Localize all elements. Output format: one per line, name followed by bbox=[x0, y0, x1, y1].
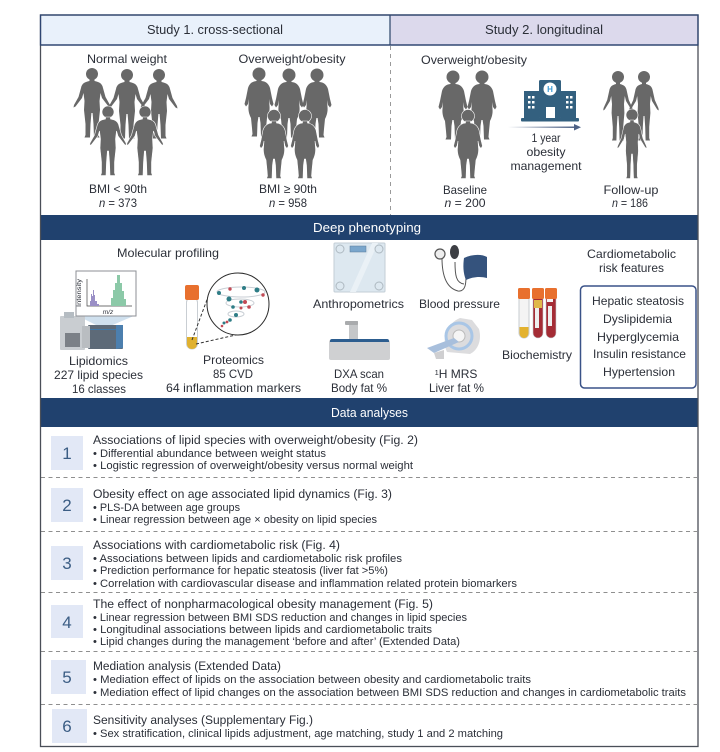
row 3: cardiometabolic risk: • Prediction performance for hepatic steatosis (liver fat >5%) bbox=[93, 565, 388, 577]
group: normal weight: Normal weight bbox=[87, 52, 168, 66]
row 1: overweight associations: • Differential abundance between weight status bbox=[93, 448, 327, 460]
group: normal weight bbox=[74, 52, 178, 210]
icon: hospital bbox=[521, 80, 579, 122]
row 3: cardiometabolic risk: • Correlation with cardiovascular disease and inflammation related protein biomarkers bbox=[93, 578, 518, 590]
row 6: sensitivity analyses bbox=[52, 709, 503, 743]
text: blood pressure: Blood pressure bbox=[419, 297, 500, 311]
panel: cardiometabolic risk list: Hypertension bbox=[603, 365, 675, 379]
text: molecular profiling: Molecular profiling bbox=[117, 246, 219, 260]
text: lipidomics: Lipidomics bbox=[69, 354, 128, 368]
heading: data analyses bbox=[40, 398, 698, 427]
panel: study 1 header bbox=[40, 15, 390, 45]
chart: mass spectrum bbox=[76, 271, 136, 316]
row 2: age associated lipid dynamics: • Linear regression between age × obesity on lipid species bbox=[93, 514, 377, 526]
row 3: cardiometabolic risk: • Associations between lipids and cardiometabolic risk profiles bbox=[93, 553, 402, 565]
chart: mass spectrum: Intensity bbox=[76, 278, 83, 307]
icon: weighing scale bbox=[334, 243, 385, 292]
row 5: mediation analysis: Mediation analysis (Extended Data) bbox=[93, 659, 281, 673]
group: baseline: Baseline bbox=[443, 183, 487, 197]
group: baseline: Overweight/obesity bbox=[421, 53, 527, 67]
text: 1H MRS: H MRS bbox=[439, 367, 477, 381]
text: obesity management bbox=[510, 131, 582, 173]
row 4: obesity management: • Linear regression between BMI SDS reduction and changes in lipid species bbox=[93, 612, 467, 624]
text: DXA scan: Body fat % bbox=[331, 381, 387, 395]
heading: deep phenotyping: Deep phenotyping bbox=[313, 221, 421, 235]
text: obesity management: obesity bbox=[526, 145, 566, 159]
row 6: sensitivity analyses: 6 bbox=[62, 717, 72, 736]
group: follow-up bbox=[603, 71, 659, 210]
row 2: age associated lipid dynamics bbox=[51, 487, 392, 526]
arrow: one year management bbox=[508, 124, 581, 130]
group: baseline: n = 200 bbox=[444, 196, 486, 210]
text: cardiometabolic risk features bbox=[587, 247, 676, 275]
panel: study 2 header: Study 2. longitudinal bbox=[485, 23, 603, 37]
text: biochemistry: Biochemistry bbox=[502, 348, 572, 362]
group: overweight/obesity cross-sectional: BMI ≥ 90th bbox=[259, 182, 317, 196]
text: lipidomics: 227 lipid species bbox=[54, 368, 143, 382]
icon: blood pressure cuff bbox=[435, 245, 487, 291]
row 1: overweight associations: • Logistic regression of overweight/obesity versus normal weight bbox=[93, 460, 413, 472]
text: obesity management: 1 year bbox=[532, 131, 560, 145]
icon: proteomics tube and protein funnel bbox=[185, 273, 269, 349]
icon: MRI scanner bbox=[427, 318, 480, 359]
group: follow-up: Follow-up bbox=[604, 183, 659, 197]
icon: biochemistry tubes bbox=[518, 288, 557, 338]
panel: cardiometabolic risk list: Dyslipidemia bbox=[603, 312, 672, 326]
text: cardiometabolic risk features: risk features bbox=[599, 261, 664, 275]
text: proteomics: 64 inflammation markers bbox=[166, 381, 301, 395]
panel: cardiometabolic risk list bbox=[580, 286, 696, 388]
row 2: age associated lipid dynamics: Obesity effect on age associated lipid dynamics (Fig. 3) bbox=[93, 487, 392, 501]
row 4: obesity management bbox=[51, 597, 467, 648]
group: follow-up: n = 186 bbox=[612, 196, 648, 210]
icon: mass spectrometer bbox=[60, 312, 136, 350]
row 4: obesity management: The effect of nonpharmacological obesity management (Fig. 5) bbox=[93, 597, 433, 611]
icon: hospital: H bbox=[547, 85, 553, 94]
group: overweight/obesity cross-sectional bbox=[238, 52, 346, 210]
row 5: mediation analysis: • Mediation effect of lipid changes on the association between BMI SDS reduction and changes in cardiometabolic traits bbox=[93, 687, 686, 699]
row 4: obesity management: 4 bbox=[62, 613, 72, 632]
text: cardiometabolic risk features: Cardiometabolic bbox=[587, 247, 676, 261]
text: proteomics: Proteomics bbox=[203, 353, 264, 367]
text: 1H MRS: 1 bbox=[435, 368, 439, 377]
panel: cardiometabolic risk list: Insulin resistance bbox=[593, 347, 686, 361]
row 3: cardiometabolic risk: Associations with cardiometabolic risk (Fig. 4) bbox=[93, 538, 340, 552]
row 4: obesity management: • Longitudinal associations between lipids and cardiometabolic traits bbox=[93, 624, 433, 636]
icon: DXA scanner bbox=[329, 321, 390, 360]
text: proteomics bbox=[166, 353, 301, 395]
panel: cardiometabolic risk list: Hepatic steatosis bbox=[592, 294, 684, 308]
text: proteomics: 85 CVD bbox=[213, 367, 253, 381]
row 6: sensitivity analyses: • Sex stratification, clinical lipids adjustment, age matching, study 1 and 2 matching bbox=[93, 728, 503, 740]
heading: data analyses: Data analyses bbox=[331, 406, 408, 420]
heading: deep phenotyping bbox=[40, 215, 698, 240]
row 1: overweight associations: Associations of lipid species with overweight/obesity (Fig. 2) bbox=[93, 433, 418, 447]
text: 1H MRS: Liver fat % bbox=[429, 381, 484, 395]
row 1: overweight associations: 1 bbox=[62, 444, 72, 463]
row 2: age associated lipid dynamics: • PLS-DA between age groups bbox=[93, 502, 240, 514]
row 5: mediation analysis bbox=[51, 659, 686, 699]
row 1: overweight associations bbox=[51, 433, 418, 472]
row 2: age associated lipid dynamics: 2 bbox=[62, 496, 72, 515]
panel: study 2 header bbox=[390, 15, 698, 45]
group: baseline bbox=[421, 53, 527, 210]
text: lipidomics: 16 classes bbox=[72, 382, 126, 396]
text: DXA scan: DXA scan bbox=[334, 367, 384, 381]
panel: cardiometabolic risk list: Hyperglycemia bbox=[597, 330, 679, 344]
group: normal weight: n = 373 bbox=[99, 196, 137, 210]
text: DXA scan bbox=[331, 367, 387, 395]
row 5: mediation analysis: • Mediation effect of lipids on the association between obesity and cardiometabolic traits bbox=[93, 674, 531, 686]
text: obesity management: management bbox=[510, 159, 582, 173]
row 5: mediation analysis: 5 bbox=[62, 668, 72, 687]
chart: mass spectrum: m/z bbox=[103, 309, 114, 316]
group: overweight/obesity cross-sectional: Overweight/obesity bbox=[238, 52, 346, 66]
row 3: cardiometabolic risk: 3 bbox=[62, 554, 72, 573]
row 4: obesity management: • Lipid changes during the management ‘before and after’ (Extended Data) bbox=[93, 636, 460, 648]
row 3: cardiometabolic risk bbox=[51, 538, 518, 590]
text: 1H MRS bbox=[429, 367, 484, 395]
group: normal weight: BMI < 90th bbox=[89, 182, 147, 196]
row 6: sensitivity analyses: Sensitivity analyses (Supplementary Fig.) bbox=[93, 713, 313, 727]
panel: study 1 header: Study 1. cross-sectional bbox=[147, 23, 283, 37]
group: overweight/obesity cross-sectional: n = 958 bbox=[269, 196, 307, 210]
text: anthropometrics: Anthropometrics bbox=[313, 297, 404, 311]
text: lipidomics bbox=[54, 354, 143, 396]
